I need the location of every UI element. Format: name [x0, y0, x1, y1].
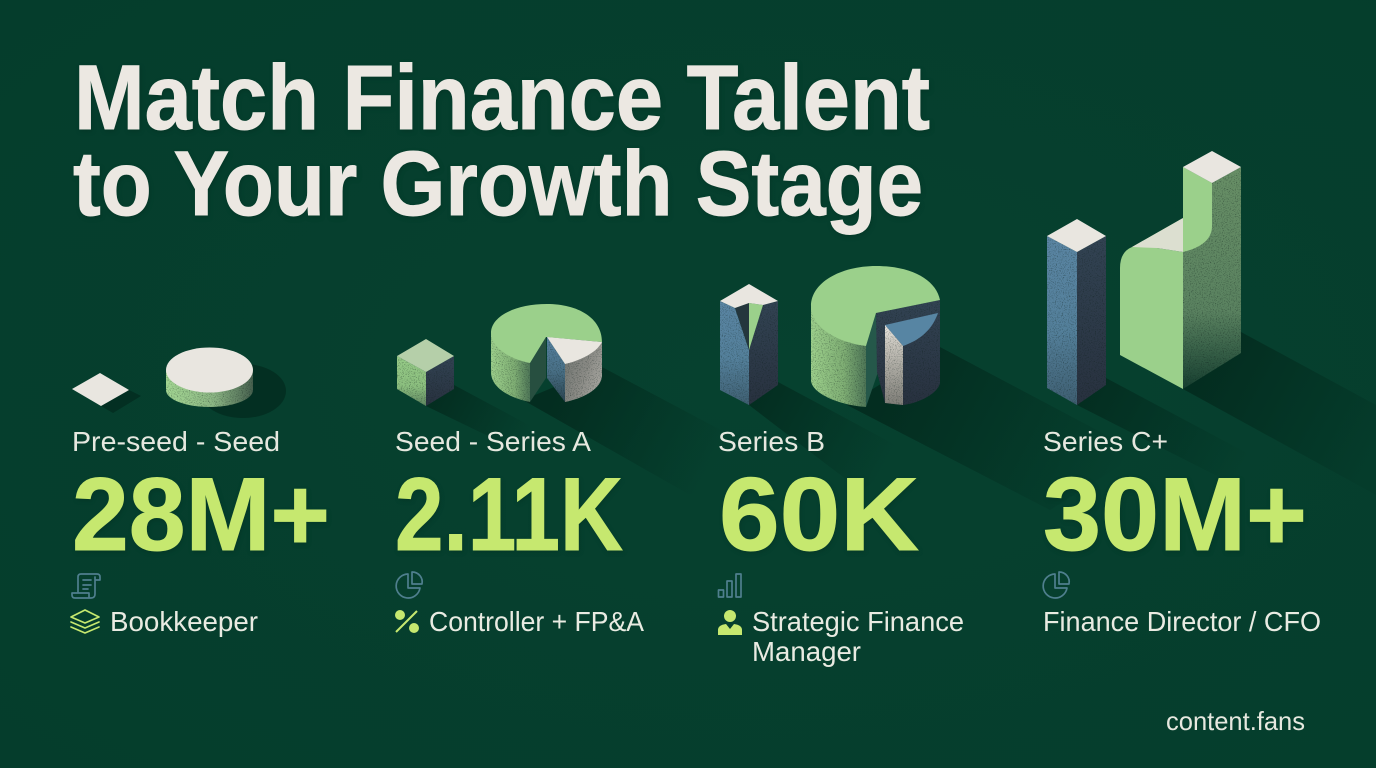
icon: flat diamond — [72, 373, 129, 406]
title: to Your Growth Stage — [73, 133, 923, 235]
column: Series C+ — [1043, 151, 1321, 637]
role: Finance Director / CFO — [1043, 606, 1321, 637]
big number: 28M+ — [72, 457, 330, 573]
column: Seed - Series A — [395, 304, 644, 637]
icon: percent — [395, 610, 419, 633]
role — [752, 606, 964, 667]
big number: 2.11K — [395, 457, 623, 573]
icon: layers — [71, 610, 99, 633]
role: Manager — [752, 636, 861, 667]
footer brand: content.fans — [1166, 706, 1305, 736]
stage label: Pre-seed - Seed — [72, 426, 280, 457]
icon: pie outline — [396, 572, 422, 598]
icon: green pie with wedge — [491, 304, 602, 402]
icon: large pie with wedge — [811, 266, 940, 407]
title: Match Finance Talent — [74, 47, 930, 149]
big number: 30M+ — [1043, 457, 1307, 573]
icon: bars — [718, 574, 741, 597]
icon: pie outline — [1043, 572, 1069, 598]
icon: white disc — [166, 348, 253, 407]
shadows cast by the 3D shapes — [101, 332, 1376, 510]
role: Strategic Finance — [752, 606, 964, 637]
stage label: Series C+ — [1043, 426, 1168, 457]
stage label: Seed - Series A — [395, 426, 591, 457]
role: Controller + FP&A — [429, 606, 644, 637]
icon: green stepped column — [1120, 151, 1241, 389]
stage label: Series B — [718, 426, 825, 457]
icon: blue column — [1047, 219, 1106, 405]
icon: tall box with notch — [720, 284, 778, 405]
role: Bookkeeper — [110, 606, 258, 637]
column: Series B — [718, 266, 964, 667]
icon: cube — [397, 339, 454, 406]
column: Pre-seed - Seed — [71, 348, 330, 637]
icon: scroll — [72, 574, 100, 598]
title — [73, 47, 930, 235]
icon: person — [718, 610, 742, 635]
big number: 60K — [719, 457, 919, 573]
